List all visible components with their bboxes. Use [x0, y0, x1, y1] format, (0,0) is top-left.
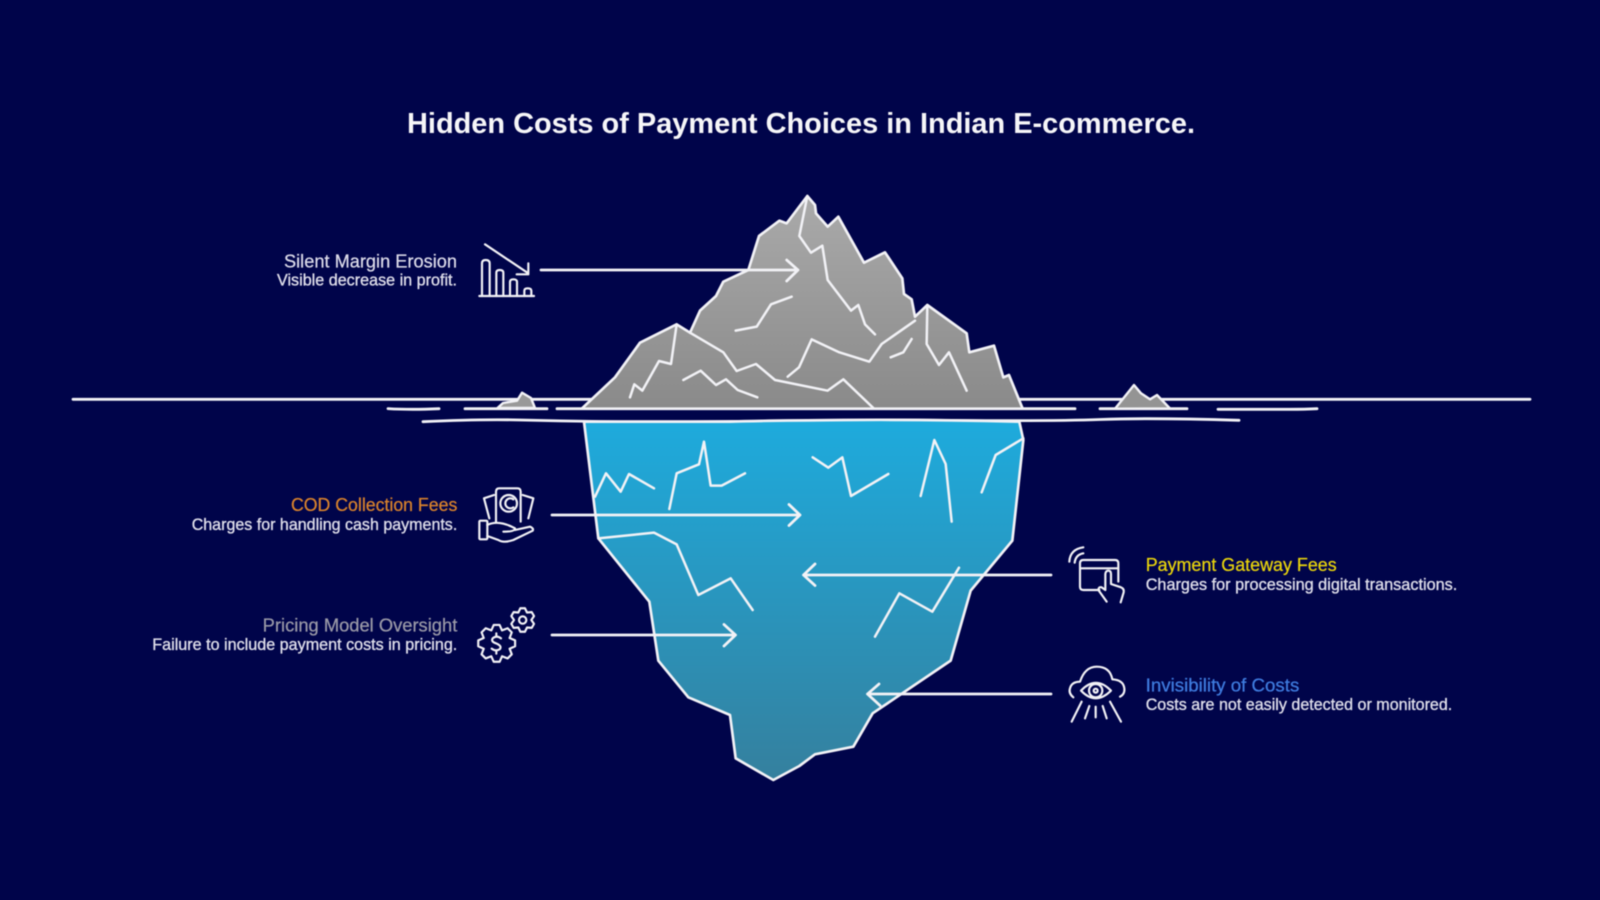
- label: pricing model oversight: Pricing Model Oversight: [263, 615, 457, 635]
- icon: eye in cloud: [1070, 667, 1124, 722]
- label: invisibility of costs: Costs are not easily detected or monitored.: [1146, 696, 1452, 714]
- label: pricing model oversight: [152, 615, 457, 654]
- icon: gears with dollar: [478, 608, 534, 662]
- arrow: invisibility of costs: [868, 684, 1051, 706]
- label: silent margin erosion: Silent Margin Erosion: [284, 251, 457, 271]
- icon: cash in hand: [479, 488, 533, 542]
- label: pricing model oversight: Failure to include payment costs in pricing.: [152, 636, 457, 654]
- small iceberg: left: [498, 393, 535, 408]
- label: payment gateway fees: Charges for processing digital transactions.: [1146, 576, 1457, 594]
- arrow: payment gateway fees: [804, 564, 1051, 586]
- label: invisibility of costs: Invisibility of Costs: [1146, 675, 1299, 695]
- label: payment gateway fees: [1146, 555, 1457, 594]
- label: COD collection fees: Charges for handling cash payments.: [192, 516, 457, 534]
- label: silent margin erosion: Visible decrease in profit.: [277, 272, 457, 290]
- label: silent margin erosion: [277, 251, 457, 290]
- waterline: [73, 399, 1530, 422]
- label: COD collection fees: [192, 495, 457, 534]
- icon: declining bar chart: [479, 244, 534, 296]
- arrow: COD collection fees: [552, 504, 800, 526]
- label: invisibility of costs: [1146, 675, 1452, 714]
- label: COD collection fees: COD Collection Fees: [291, 495, 457, 515]
- label: payment gateway fees: Payment Gateway Fees: [1146, 555, 1337, 575]
- iceberg below water: [584, 420, 1023, 780]
- title: Hidden Costs of Payment Choices in Indian E-commerce.: [407, 108, 1195, 140]
- iceberg above water: [582, 196, 1023, 409]
- arrow: silent margin erosion: [541, 260, 798, 281]
- small iceberg: right: [1115, 385, 1170, 409]
- icon: card with touch and wifi: [1069, 547, 1124, 602]
- arrow: pricing model oversight: [552, 624, 736, 646]
